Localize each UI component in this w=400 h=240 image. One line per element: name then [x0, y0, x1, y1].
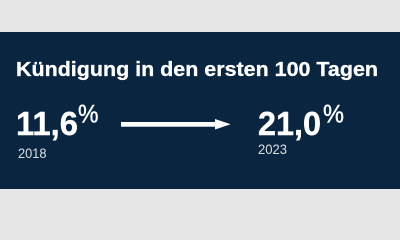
year 2023: 2023 [258, 142, 287, 157]
value 2018: 11,6 [16, 105, 78, 142]
stat: 2018 [16, 100, 98, 161]
value 2023: 21,0 [258, 105, 321, 142]
stat: 2023 [258, 100, 344, 157]
year 2018: 2018 [18, 146, 46, 161]
title: Kündigung in den ersten 100 Tagen [16, 58, 378, 81]
percent sign 2018: % [78, 100, 98, 128]
percent sign 2023: % [323, 100, 344, 128]
arrow [121, 119, 231, 130]
panel: background [0, 32, 400, 189]
